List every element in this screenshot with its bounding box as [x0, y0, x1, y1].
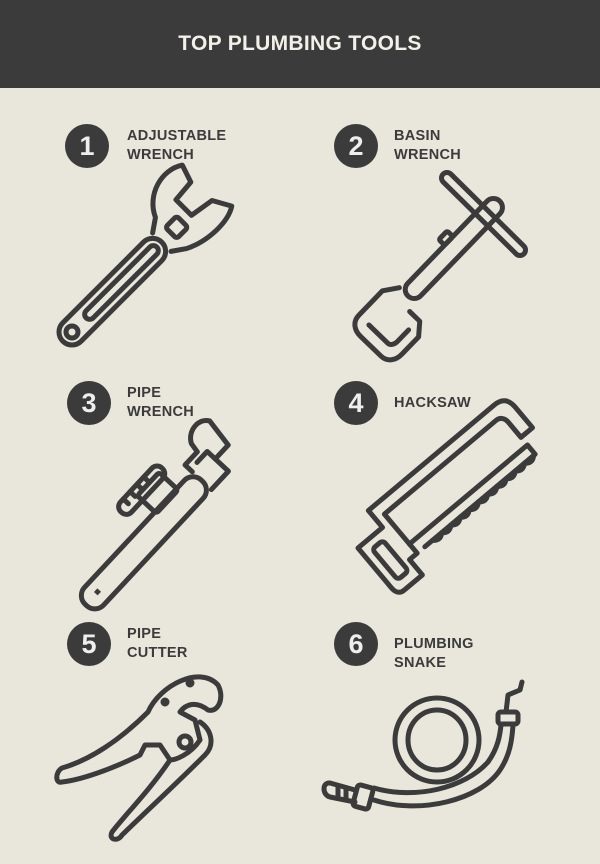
badge 6 — [334, 622, 378, 666]
label 2 — [394, 128, 461, 163]
badge 3 — [67, 381, 111, 425]
icon: plumbing snake — [324, 682, 522, 810]
icon: pipe cutter — [57, 677, 221, 839]
badge 1 — [65, 124, 109, 168]
label 1: ADJUSTABLE — [127, 128, 226, 144]
title — [0, 0, 600, 88]
label 5 — [127, 626, 188, 661]
badge 5: 5 — [81, 629, 97, 659]
badge 3: 3 — [81, 388, 97, 418]
label 1: WRENCH — [127, 147, 194, 163]
badge 2: 2 — [348, 131, 364, 161]
badge 6: 6 — [348, 629, 364, 659]
icon: basin wrench — [349, 178, 526, 366]
badge 2 — [334, 124, 378, 168]
label 5: PIPE — [127, 626, 161, 642]
label 6: PLUMBING — [394, 636, 474, 652]
label 2: BASIN — [394, 128, 441, 144]
badge 5 — [67, 622, 111, 666]
label 6: SNAKE — [394, 655, 446, 671]
badge 4 — [334, 381, 378, 425]
badge 1: 1 — [79, 131, 95, 161]
label 4: HACKSAW — [394, 395, 471, 411]
label 1 — [127, 128, 226, 163]
icon: hacksaw — [344, 396, 559, 595]
icon: adjustable wrench — [31, 157, 236, 363]
label 5: CUTTER — [127, 645, 188, 661]
icon: pipe wrench — [53, 414, 245, 614]
label 3: PIPE — [127, 385, 161, 401]
label 3: WRENCH — [127, 404, 194, 420]
badge 4: 4 — [348, 388, 364, 418]
label 2: WRENCH — [394, 147, 461, 163]
label 6 — [394, 636, 474, 671]
label 3 — [127, 385, 194, 420]
title: TOP PLUMBING TOOLS — [178, 32, 422, 55]
